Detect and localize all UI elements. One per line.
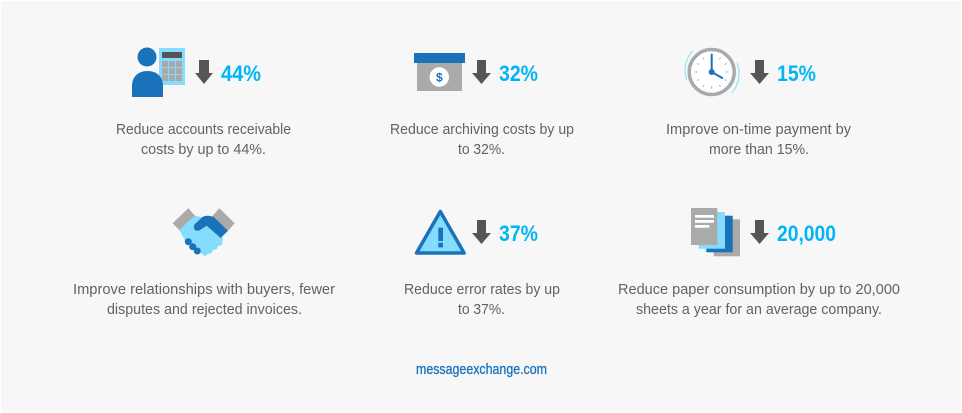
- panel: paper consumption: [618, 208, 900, 318]
- icon: archive box with dollar: [414, 53, 465, 91]
- panel: on-time payment: [666, 50, 851, 158]
- arrow: down: [472, 60, 491, 84]
- text: on-time payment description: more than 15%.: [709, 141, 809, 158]
- icon: warning triangle: [416, 212, 464, 253]
- text: error rates description: to 37%.: [458, 301, 505, 318]
- text: on-time payment description: Improve on-time payment by: [666, 121, 851, 138]
- text: relationships description: disputes and rejected invoices.: [107, 301, 302, 318]
- stat: 44%: 44%: [221, 61, 261, 86]
- arrow: down: [750, 220, 769, 244]
- icon: clock: [685, 50, 739, 94]
- icon: paper stack: [691, 208, 740, 256]
- icon: person with calculator: [132, 48, 185, 97]
- text: accounts receivable description: Reduce accounts receivable: [116, 121, 291, 138]
- panel: relationships: [73, 208, 335, 318]
- stat: 37%: 37%: [499, 221, 538, 246]
- stat: 32%: 32%: [499, 61, 538, 86]
- stat: 20,000: 20,000: [777, 221, 836, 246]
- icon: handshake: [173, 208, 235, 256]
- stat: 15%: 15%: [777, 61, 816, 86]
- icon: archive box with dollar: $: [436, 70, 443, 84]
- text: accounts receivable description: costs by up to 44%.: [141, 141, 266, 158]
- text: archiving description: Reduce archiving costs by up: [390, 121, 574, 138]
- footer: website link text: messageexchange.com: [416, 362, 547, 378]
- text: error rates description: Reduce error rates by up: [404, 281, 560, 298]
- arrow: down: [472, 220, 491, 244]
- panel: error rates: [404, 212, 560, 318]
- panel: archiving costs: [390, 53, 574, 158]
- text: paper consumption description: Reduce paper consumption by up to 20,000: [618, 281, 900, 298]
- panel: accounts receivable: [116, 48, 291, 158]
- text: archiving description: to 32%.: [458, 141, 505, 158]
- text: relationships description: Improve relationships with buyers, fewer: [73, 281, 335, 298]
- arrow: down: [195, 60, 213, 84]
- text: paper consumption description: sheets a year for an average company.: [636, 301, 882, 318]
- arrow: down: [750, 60, 769, 84]
